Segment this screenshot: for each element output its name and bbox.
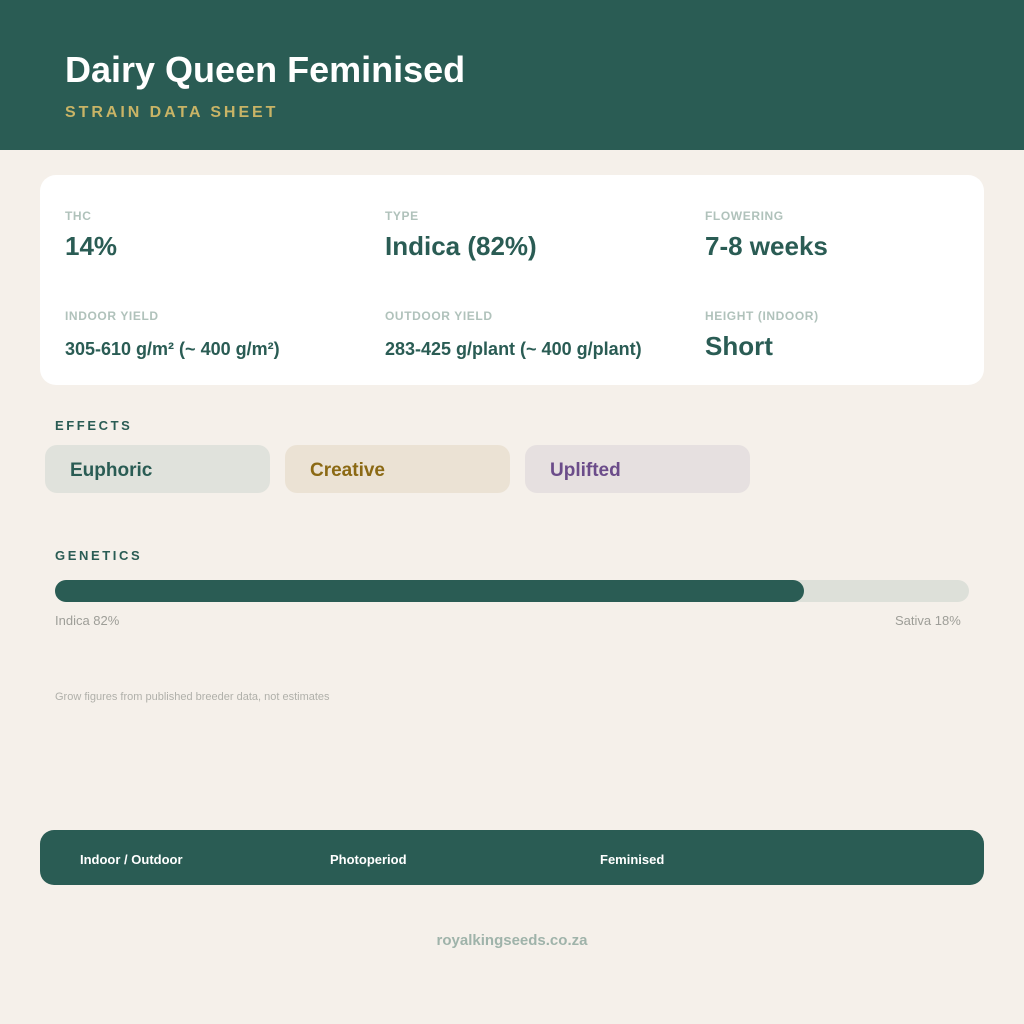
label: indica: Indica 82% — [55, 613, 119, 628]
stat: height: HEIGHT (INDOOR) — [705, 309, 819, 323]
website: royalkingseeds.co.za — [437, 932, 587, 949]
stat: height: Short — [705, 331, 773, 361]
effect pill: uplifted — [525, 445, 750, 493]
stat: outdoor yield — [385, 309, 642, 359]
stat: flowering — [705, 209, 828, 261]
heading: effects: EFFECTS — [55, 418, 132, 433]
indica share — [55, 580, 804, 602]
effect pill: euphoric: Euphoric — [70, 460, 152, 481]
stat: type: TYPE — [385, 209, 419, 223]
stat: outdoor yield: OUTDOOR YIELD — [385, 309, 493, 323]
stat: outdoor yield: 283-425 g/plant (~ 400 g/plant) — [385, 339, 642, 359]
effect pill: creative: Creative — [310, 460, 385, 481]
effect pill: uplifted: Uplifted — [550, 460, 621, 481]
stat: flowering: FLOWERING — [705, 209, 784, 223]
footer band: attributes — [40, 830, 984, 885]
header band — [0, 0, 1024, 150]
attribute: photoperiod: Photoperiod — [330, 852, 407, 867]
title: Dairy Queen Feminised — [65, 49, 465, 90]
footnote: Grow figures from published breeder data, not estimates — [55, 691, 330, 703]
effect pill: euphoric — [45, 445, 270, 493]
label: sativa: Sativa 18% — [895, 613, 961, 628]
stat: height — [705, 309, 819, 361]
subtitle: STRAIN DATA SHEET — [65, 104, 278, 121]
stat: indoor yield — [65, 309, 280, 359]
attribute: indoor outdoor: Indoor / Outdoor — [80, 852, 183, 867]
stat: THC — [65, 209, 117, 261]
stat: indoor yield: INDOOR YIELD — [65, 309, 159, 323]
genetics bar — [55, 580, 969, 602]
effect pill: creative — [285, 445, 510, 493]
stat: THC: THC — [65, 209, 91, 223]
stat: THC: 14% — [65, 231, 117, 261]
stat: indoor yield: 305-610 g/m² (~ 400 g/m²) — [65, 339, 280, 359]
stat: type: Indica (82%) — [385, 231, 537, 261]
stat: flowering: 7-8 weeks — [705, 231, 828, 261]
stat: type — [385, 209, 537, 261]
heading: genetics: GENETICS — [55, 548, 142, 563]
attribute: feminised: Feminised — [600, 852, 664, 867]
panel: strain stats — [40, 175, 984, 385]
